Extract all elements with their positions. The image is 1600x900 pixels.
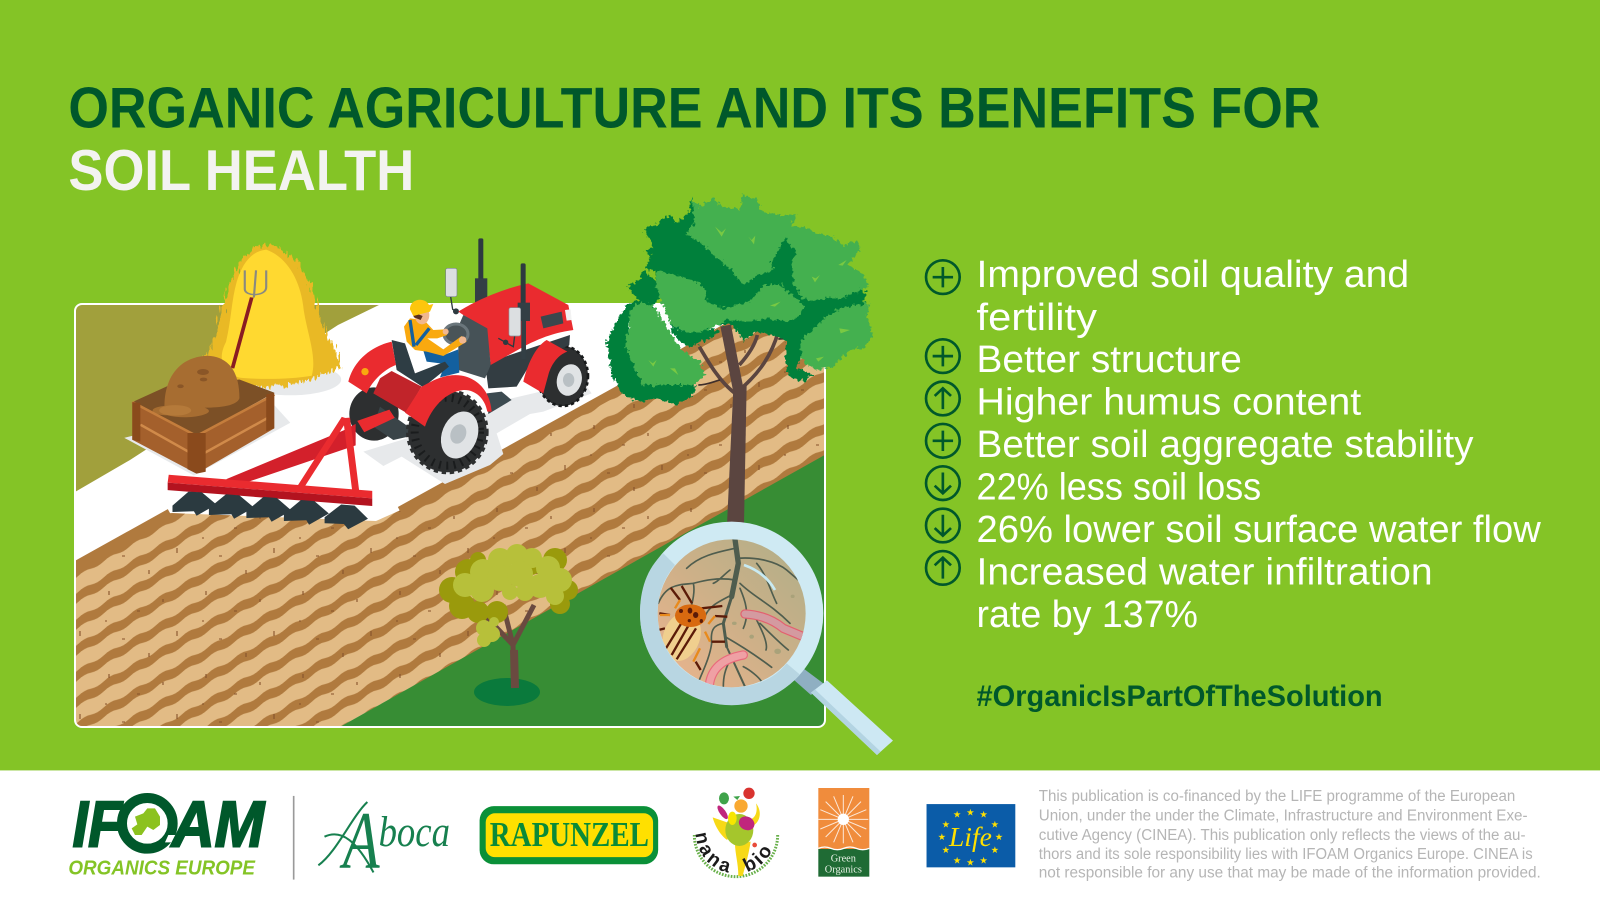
logo: EU LIFE: ★: [953, 855, 961, 866]
logo: Rapunzel: RAPUNZEL: [490, 815, 649, 854]
title: SOIL HEALTH: [68, 139, 414, 203]
benefit: better structure: Better structure: [977, 338, 1242, 380]
icon: arrow down: [926, 509, 960, 542]
main fender: [405, 375, 492, 427]
divider: [293, 796, 294, 880]
logo: Green Organics: Green: [831, 853, 856, 864]
driver: [404, 300, 467, 377]
rear fenders: [348, 342, 426, 413]
logo: Green Organics: [818, 788, 869, 877]
benefit: improved soil quality: Improved soil quality and: [977, 253, 1409, 295]
handle: [793, 668, 893, 755]
worms: [709, 614, 805, 685]
logo: EU LIFE: ★: [953, 809, 961, 820]
logo: EU LIFE: ★: [991, 820, 999, 831]
logo: Aboca: boca: [379, 808, 450, 856]
leaf accents: [648, 227, 850, 375]
benefit: higher humus: Higher humus content: [977, 381, 1362, 423]
wooden crate with compost: [124, 356, 290, 475]
logo: nana bio: bio: [742, 847, 770, 872]
illustration: organic farm scene: [75, 195, 893, 755]
crop-scale group for hay, crate, plough: [124, 244, 341, 475]
icon: pitchfork: [232, 270, 266, 368]
chassis: [485, 335, 570, 388]
dark foliage: [607, 197, 867, 405]
benefit: lower water flow: 26% lower soil surface water flow: [977, 508, 1542, 550]
logo: nana bio: nana: [696, 832, 730, 873]
footer band: [0, 770, 1600, 900]
panel: farm landscape: [75, 268, 830, 728]
logo: EU LIFE: ★: [942, 845, 950, 856]
icon: plus: [926, 339, 960, 373]
front fender: [523, 340, 567, 393]
light foliage: [625, 195, 873, 385]
rear wheel: [408, 391, 487, 472]
icon: arrow up: [926, 382, 960, 415]
tractor ground shadow: [363, 382, 592, 484]
roots: [658, 539, 798, 687]
logo: IFOAM Organics Europe: AM: [170, 788, 265, 861]
benefit: aggregate stability: Better soil aggregate stability: [977, 423, 1474, 465]
disclaimer text: thors and its sole responsibility lies with IFOAM Organics Europe. CINEA is: [1039, 846, 1533, 863]
icon: arrow up: [926, 551, 960, 585]
logo: EU LIFE: ★: [980, 809, 988, 820]
logo: IFOAM Organics Europe: ORGANICS EUROPE: [68, 857, 256, 879]
tractor: [348, 238, 592, 484]
icon: arrow down: [926, 466, 960, 500]
benefit: water infiltration: rate by 137%: [977, 593, 1198, 635]
logo: Green Organics: Organics: [825, 864, 862, 875]
icon: plus: [926, 260, 960, 294]
logo: Aboca: [318, 794, 450, 885]
logo: nana bio: [692, 788, 780, 878]
title: [68, 77, 1320, 203]
disclaimer text: Union, under the under the Climate, Infrastructure and Environment Exe-: [1039, 807, 1528, 824]
logo: EU LIFE: ★: [980, 855, 988, 866]
logo: IFOAM Organics Europe: IF: [73, 788, 123, 861]
icon: plus: [926, 424, 960, 458]
front wheel: [537, 346, 588, 406]
benefits list: [926, 253, 1542, 635]
logo: EU LIFE: Life: [948, 821, 992, 852]
small olive tree: [439, 544, 578, 706]
benefit: improved soil quality: fertility: [977, 296, 1097, 338]
logo: EU LIFE: ★: [942, 820, 950, 831]
exhaust pipes: [475, 238, 487, 302]
tree: [607, 195, 873, 525]
disclaimer text: cutive Agency (CINEA). This publication only reflects the views of the au-: [1039, 827, 1526, 844]
logo: EU LIFE: ★: [938, 832, 946, 843]
tree trunk: [698, 326, 790, 525]
logo: IFOAM Organics Europe: [68, 788, 265, 879]
beetle: [656, 586, 727, 670]
rear left wheel: [349, 387, 399, 441]
logo: EU LIFE: ★: [966, 857, 975, 868]
plough: [168, 410, 395, 529]
hood: [458, 283, 573, 378]
second exhaust and mirror: [509, 263, 530, 359]
benefit: less soil loss: 22% less soil loss: [977, 466, 1261, 508]
steering wheel: [444, 324, 468, 344]
haystack: [204, 244, 341, 395]
disclaimer text: not responsible for any use that may be made of the information provided.: [1039, 865, 1541, 882]
seat: [392, 340, 449, 387]
hashtag: #OrganicIsPartOfTheSolution: [977, 680, 1383, 713]
benefit: water infiltration: Increased water infiltration: [977, 550, 1433, 592]
title: ORGANIC AGRICULTURE AND ITS BENEFITS FOR: [68, 77, 1320, 141]
logo: Rapunzel: [480, 806, 658, 864]
side mirror: [446, 268, 459, 314]
logo: EU LIFE: ★: [991, 845, 999, 856]
logo: Aboca: A: [339, 794, 380, 885]
logo: EU LIFE: ★: [966, 807, 975, 818]
logo: EU LIFE: [927, 804, 1015, 868]
disclaimer text: [1039, 788, 1541, 882]
logo: EU LIFE: ★: [995, 832, 1003, 843]
disclaimer text: This publication is co-financed by the LIFE programme of the European: [1039, 788, 1515, 805]
lens rim: [640, 522, 823, 705]
water streak: [744, 565, 775, 590]
soil cross-section: [658, 539, 806, 688]
magnifying glass: [640, 522, 893, 755]
